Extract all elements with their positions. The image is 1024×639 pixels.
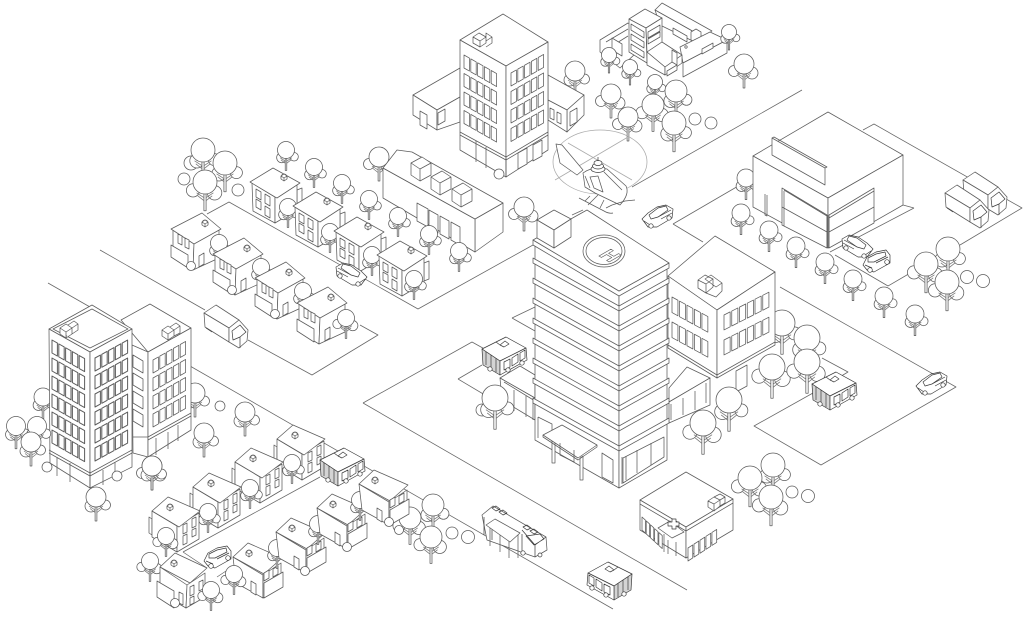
parked trucks: [945, 172, 1007, 228]
lower left upper house row: [149, 425, 325, 556]
top office tower with side wings: [413, 14, 584, 179]
shelter: [486, 519, 520, 558]
tree cluster by clinic: [731, 453, 814, 526]
canopy: [543, 425, 597, 480]
trees behind buildings: [33, 61, 801, 490]
garage building: [753, 112, 903, 248]
parked cars: [842, 235, 890, 272]
ambulance on road: [587, 562, 632, 600]
hospital tower: [533, 210, 669, 488]
roof sign: [772, 137, 827, 185]
helicopter: [553, 130, 647, 213]
trees along garage: [731, 204, 928, 336]
clinic cross: [668, 519, 679, 529]
upper house row: [250, 168, 429, 299]
roof box: [537, 210, 571, 248]
fuselage: [583, 168, 627, 205]
road and lot lines: [48, 90, 1022, 609]
ground floor entrance: [538, 417, 552, 442]
ambulance right: [812, 372, 857, 410]
tree cluster upper left: [178, 138, 381, 219]
trees around courtyard: [596, 24, 758, 152]
right wing: [548, 75, 584, 132]
front wing: [680, 32, 727, 77]
delivery truck: [204, 305, 248, 348]
roof boxes: [473, 33, 492, 47]
floor bands: [533, 258, 669, 451]
helipad marking: H: [593, 247, 625, 265]
hospital annex: [668, 236, 775, 392]
tree cluster by bus: [393, 494, 474, 563]
roof dormers: [411, 157, 472, 207]
rotor disc: [553, 130, 647, 194]
front corner house: [157, 553, 207, 608]
tail boom: [556, 144, 583, 175]
low block: [647, 42, 682, 76]
clinic awning: [658, 521, 684, 556]
back wing: [655, 3, 712, 46]
back tower: [121, 304, 191, 457]
tree cluster right: [907, 237, 990, 311]
annex roof boxes: [698, 275, 722, 297]
ambulance among houses: [320, 448, 365, 486]
left lobby wing: [500, 366, 535, 420]
car near houses: [336, 263, 367, 286]
long roofed building: [383, 150, 503, 252]
skids: [579, 195, 635, 213]
car right: [916, 372, 947, 395]
small car lower left: [204, 546, 231, 568]
helipad marking: [583, 235, 625, 267]
front tower: [49, 305, 132, 488]
ambulance by lobby: [482, 337, 527, 375]
trees around hospital: [476, 325, 826, 454]
bus body: [482, 506, 547, 557]
twin apartment towers: [49, 304, 191, 488]
car by helicopter: [642, 205, 673, 228]
windows: [464, 54, 544, 142]
trees around towers: [6, 401, 259, 521]
left wing: [600, 23, 650, 68]
left house row: [171, 213, 358, 344]
courtyard building complex: [600, 3, 727, 77]
right lobby wing: [669, 367, 710, 423]
trees beside long building: [389, 208, 471, 271]
lower left lower house row: [137, 470, 409, 610]
left wing: [413, 68, 460, 130]
clinic: [640, 472, 733, 561]
tower: [629, 9, 662, 63]
roof: [533, 210, 669, 296]
clinic roof boxes: [708, 494, 725, 511]
rotor hub: [591, 157, 605, 172]
bus and shelter: [482, 506, 547, 558]
